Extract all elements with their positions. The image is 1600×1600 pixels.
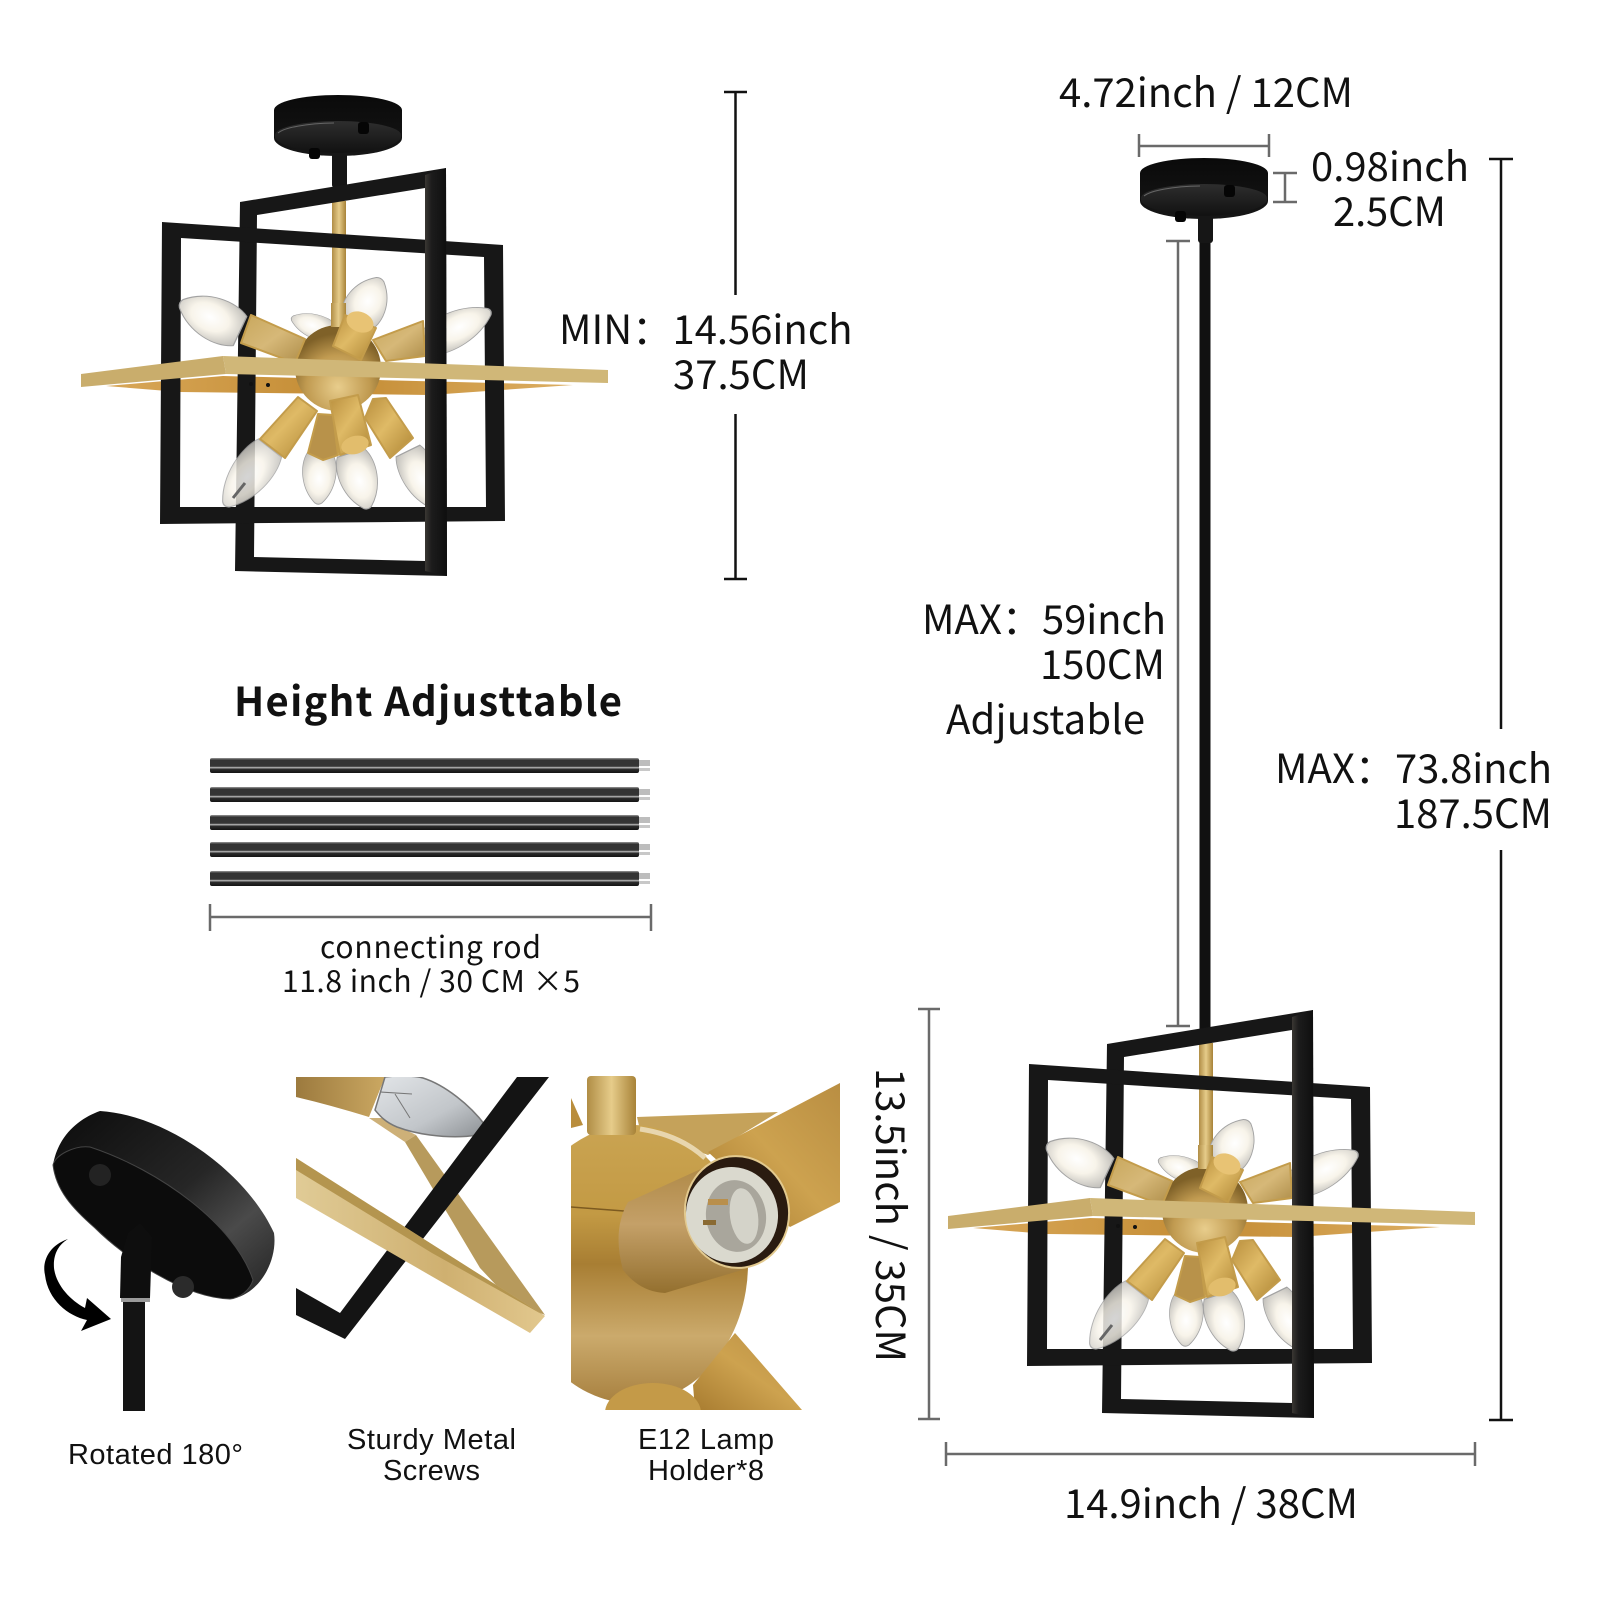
connecting rods — [210, 758, 650, 886]
black frame — [296, 1077, 549, 1339]
canopy plate — [53, 1111, 275, 1299]
dimension: lamp width line — [946, 1442, 1475, 1466]
gold beam short segment — [369, 1118, 416, 1142]
dimension: canopy height line — [1273, 173, 1297, 202]
label: lamp width: 14.9inch / 38CM — [1064, 1472, 1358, 1530]
dimension: canopy width line — [1139, 134, 1269, 157]
canopy stem — [1198, 200, 1213, 243]
thin gold beam — [405, 1135, 545, 1315]
label: overall max height: 187.5CM — [1394, 782, 1552, 840]
detail: rotating canopy — [44, 1111, 275, 1411]
label: canopy height: 0.98inch — [1311, 135, 1469, 193]
label: max rod length: MAX： — [922, 588, 1042, 646]
dimension: overall max height line — [1489, 159, 1513, 1420]
label: overall max height — [1275, 737, 1552, 840]
label: max rod length: 150CM — [1040, 633, 1165, 691]
lamp cage with bulbs — [81, 168, 608, 576]
label: max rod length: Adjustable — [946, 688, 1145, 746]
small side arm — [571, 1098, 583, 1128]
caption: sturdy metal screws — [347, 1424, 516, 1487]
caption: E12 lamp holder: Holder*8 — [648, 1455, 764, 1487]
dimension: rod length line — [1166, 241, 1190, 1026]
label: minimum height: 37.5CM — [673, 343, 809, 401]
stem and rod — [120, 1223, 152, 1411]
glass bulb — [375, 1076, 485, 1137]
long rod — [1200, 240, 1210, 1030]
gold sphere — [571, 1125, 748, 1400]
label: canopy height — [1311, 135, 1469, 238]
label: overall max height: MAX： — [1275, 737, 1395, 795]
label: lamp height: 13.5inch / 35CM — [864, 1068, 922, 1362]
short stem — [332, 136, 347, 188]
label: max rod length — [922, 588, 1166, 746]
label: overall max height: 73.8inch — [1395, 737, 1552, 795]
dimension: lamp height line — [918, 1009, 940, 1419]
caption: E12 lamp holder — [638, 1424, 774, 1487]
pendant light, short mount (flush) — [81, 95, 608, 576]
socket tube — [619, 1168, 742, 1293]
pendant light, full rod (long) — [948, 158, 1475, 1418]
lamp cage with bulbs — [948, 1010, 1475, 1418]
lamp socket — [296, 1077, 385, 1117]
label: max rod length: 59inch — [1042, 588, 1166, 646]
wide gold beam — [296, 1158, 545, 1333]
dimension: minimum height line — [724, 92, 747, 579]
lower knob — [605, 1383, 701, 1410]
caption: sturdy metal screws: Screws — [383, 1455, 480, 1487]
socket opening — [684, 1155, 790, 1269]
caption: rotated: Rotated 180° — [68, 1439, 243, 1471]
ceiling canopy — [1140, 158, 1268, 222]
label: connecting rod — [282, 923, 580, 1001]
lower arm — [693, 1333, 802, 1410]
caption: sturdy metal screws: Sturdy Metal — [347, 1424, 516, 1456]
caption: E12 lamp holder: E12 Lamp — [638, 1424, 774, 1456]
label: minimum height: MIN： — [559, 298, 672, 356]
heading: height adjustable: Height Adjusttable — [234, 670, 622, 728]
right arm — [708, 1083, 840, 1227]
ceiling canopy — [274, 95, 402, 159]
label: canopy height: 2.5CM — [1333, 180, 1446, 238]
label: minimum height — [559, 298, 852, 401]
back gold bar — [637, 1112, 778, 1155]
label: minimum height: 14.56inch — [672, 298, 852, 356]
icon: rotation arrow — [44, 1239, 111, 1331]
detail: metal frame joint — [296, 1076, 549, 1339]
label: connecting rod: connecting rod — [320, 923, 541, 967]
dimension: rod length — [210, 904, 651, 931]
label: canopy width: 4.72inch / 12CM — [1059, 61, 1353, 119]
label: connecting rod: 11.8 inch / 30 CM ×5 — [282, 957, 580, 1001]
detail: lamp holder — [571, 1076, 840, 1410]
top stem — [587, 1076, 636, 1135]
